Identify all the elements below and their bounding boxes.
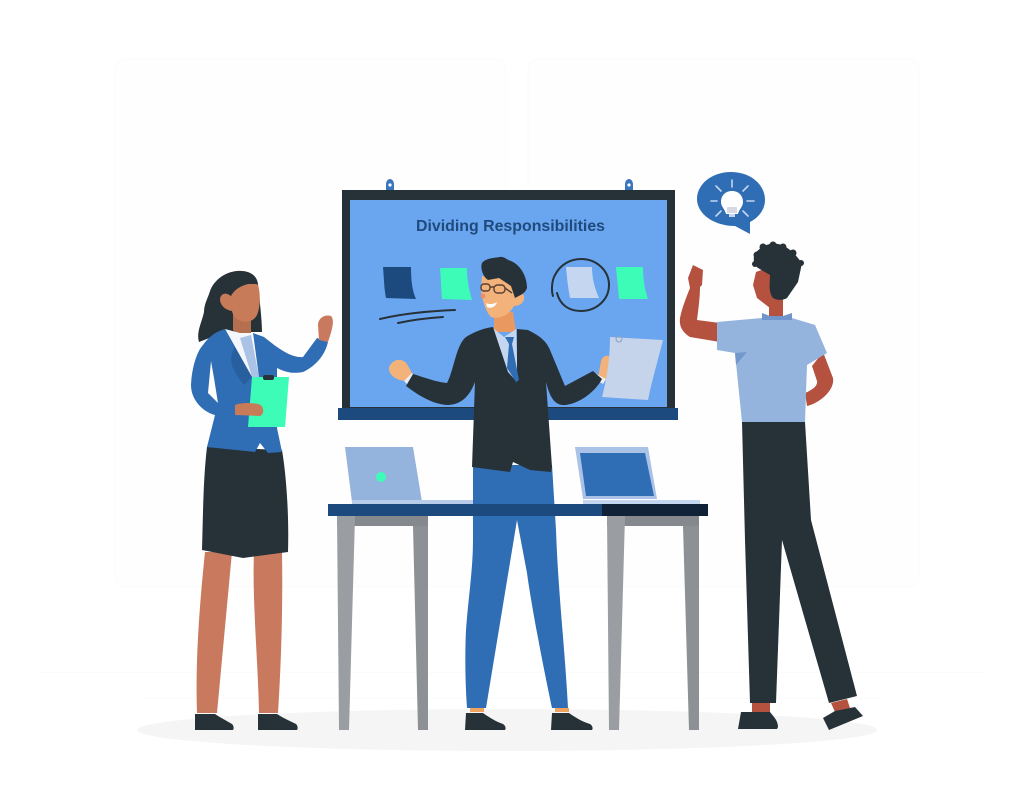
shirt [717,318,827,422]
trousers [742,422,857,703]
person: woman with clipboard [191,271,333,730]
sticky note: light in circle [566,267,599,298]
table [328,504,708,730]
lapel shade [226,331,252,385]
board surface [350,200,667,407]
neck [494,312,516,332]
right table frame [607,516,699,730]
clipboard [248,375,289,427]
shoes [738,712,778,729]
presentation board [338,179,678,420]
shirt [493,328,518,385]
left table frame [337,516,428,730]
sticky note: dark [383,267,416,299]
armpit cut-out [208,361,218,403]
presenter legs [465,465,593,730]
board hooks [386,179,633,190]
neck [769,295,783,316]
jacket [406,327,602,472]
smile [486,302,497,308]
tie [505,337,519,382]
tie [240,335,259,377]
hair [752,242,804,300]
lightbulb [721,191,743,214]
person: man with raised arm [680,242,863,730]
board frame [342,190,675,412]
head [480,257,527,318]
raised arm [680,265,720,342]
neck and face [233,312,251,338]
paper [602,336,663,400]
board title: Dividing Responsibilities [416,218,605,235]
hand-drawn circle [552,259,609,311]
cuffs [404,373,415,385]
far arm [805,352,833,406]
cheek [480,294,486,298]
shirt [225,329,259,377]
shoes [465,713,506,730]
ankles [470,708,484,712]
sticky note: green [440,268,472,300]
laptop: right [575,447,700,504]
laptop: left [345,447,473,504]
jacket [191,329,328,453]
light rays [711,180,754,216]
floor shadow [137,709,877,751]
sleeve fold [735,352,747,365]
hair fringe [224,278,258,296]
raised fist [318,315,333,342]
board ledge [338,408,678,420]
hair back [198,271,262,342]
sticky note: green right [616,267,648,299]
speech bubble with lightbulb [697,172,765,234]
person: presenter upper body [389,257,663,472]
face [481,276,524,318]
background panels [40,59,984,699]
legs [197,552,232,713]
hair [481,257,527,298]
shoes [195,714,234,730]
collar [762,313,792,320]
hands [389,360,413,381]
head skin [753,266,776,308]
trousers [465,465,568,708]
skirt [202,447,288,558]
hand on clipboard [235,403,263,416]
glasses [481,284,512,293]
tabletop [328,504,602,516]
ankles [752,703,770,712]
scribble lines [380,310,455,323]
